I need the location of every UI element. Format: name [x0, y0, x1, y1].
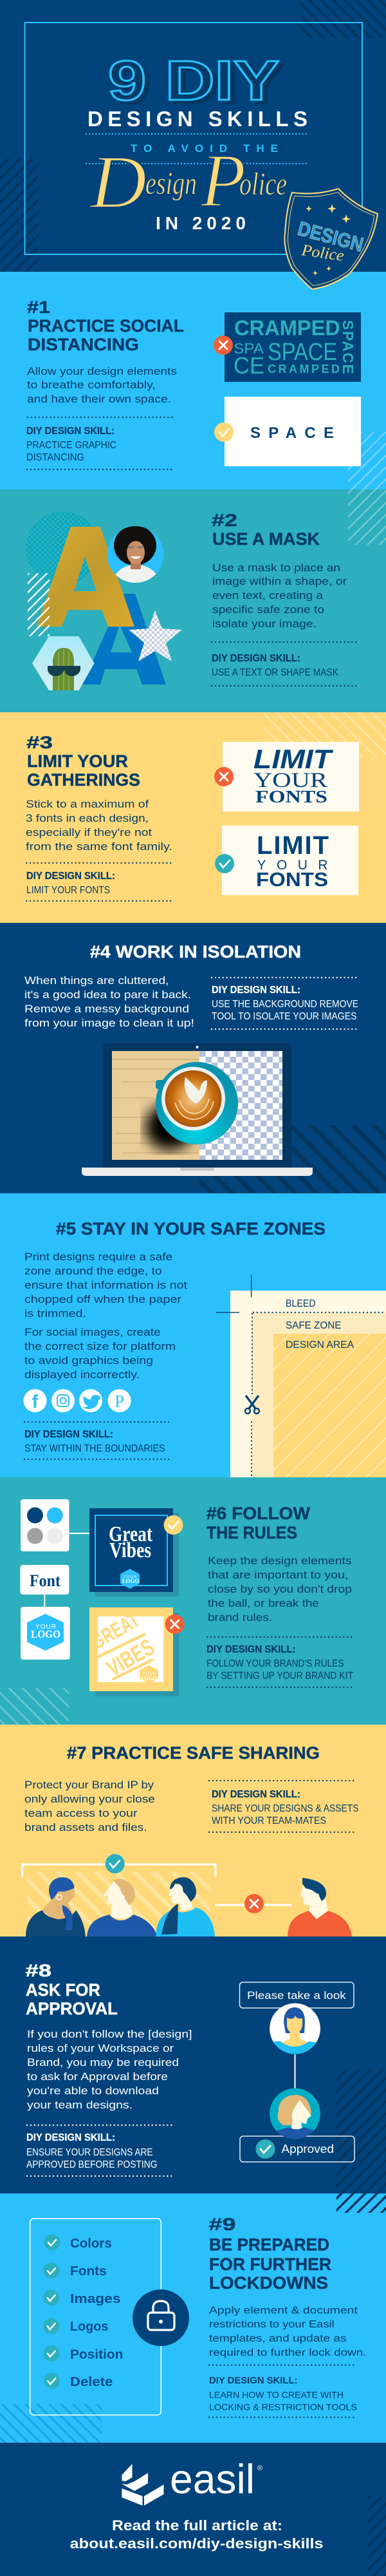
heading #5: #5 STAY IN YOUR SAFE ZONES [56, 1219, 326, 1238]
title: 9 DIY: 9 DIY [113, 53, 284, 115]
title: 9 DIY: 9 DIY [108, 50, 279, 112]
skill: APPROVED BEFORE POSTING [26, 2159, 157, 2170]
panel: stay in your safe zones [0, 1193, 386, 1477]
heading #1: #1 [27, 298, 50, 317]
badge: design police shield [284, 189, 378, 289]
excluded connector [215, 1904, 291, 1906]
body text: Keep the design elements [208, 1555, 351, 1567]
body text: Allow your design elements [27, 366, 177, 377]
heading #3: #3 [26, 733, 53, 752]
skill [212, 985, 358, 1022]
skill [207, 1644, 353, 1681]
title: design police script: D [89, 140, 147, 224]
connectors [44, 1533, 92, 1607]
icon: cross [214, 336, 233, 355]
skill [26, 871, 115, 896]
example: consistent fonts: YOUR [257, 858, 328, 873]
body text: only allowing your close [24, 1794, 155, 1805]
skill: DIY DESIGN SKILL: [212, 1789, 300, 1800]
panel: header [0, 0, 386, 272]
status box: approved: Approved [281, 2143, 334, 2155]
laptop with coffee [82, 1043, 313, 1176]
body text: it's a good idea to pare it back. [24, 989, 191, 1001]
card: logo: YOUR [35, 1624, 56, 1631]
heading #9: BE PREPARED [209, 2235, 329, 2254]
logo: easil [122, 2456, 262, 2506]
body text: close by so you don't drop [208, 1584, 352, 1595]
bad design example: LOGO [141, 1675, 157, 1681]
title: to avoid the: TO AVOID THE [131, 142, 278, 155]
skill: SHARE YOUR DESIGNS & ASSETS [212, 1803, 359, 1814]
skill [212, 1789, 359, 1826]
checklist item: images: Images [70, 2292, 121, 2306]
icons: social media: P [115, 1392, 124, 1411]
body text: Remove a messy background [24, 1003, 189, 1015]
example: consistent fonts: LIMIT [257, 831, 329, 860]
heading #3: GATHERINGS [27, 770, 140, 790]
heading #8 [26, 1961, 118, 2018]
body text: to ask for Approval before [27, 2071, 168, 2083]
call to action [70, 2517, 323, 2552]
person: team member 3 [156, 1877, 215, 1937]
good design example [89, 1508, 179, 1596]
icons: social media: f [32, 1392, 39, 1412]
header frame [24, 23, 362, 254]
example: mixed fonts: FONTS [255, 787, 327, 806]
body text: your team designs. [27, 2099, 133, 2111]
body text: Protect your Brand IP by [24, 1779, 154, 1791]
skill: TOOL TO ISOLATE YOUR IMAGES [212, 1011, 356, 1022]
heading #2: #2 [212, 511, 237, 530]
example: cramped: CE [234, 352, 264, 379]
good design example: LOGO [122, 1578, 139, 1584]
checklist item: position: Position [70, 2348, 123, 2362]
heading #9: FOR FURTHER [209, 2255, 331, 2274]
body text [27, 2029, 192, 2111]
checklist item: fonts: Fonts [70, 2264, 107, 2278]
icon: check [106, 1854, 125, 1873]
body text: For social images, create [24, 1327, 161, 1338]
body text [27, 366, 177, 405]
checklist item: fonts [44, 2263, 107, 2278]
skill: DIY DESIGN SKILL: [24, 1429, 113, 1440]
body text: the ball, or break the [208, 1598, 319, 1609]
letter A gold [37, 527, 134, 627]
body text: to breathe comfortably, [27, 379, 156, 391]
example: cramped: SPACE [340, 320, 356, 374]
body text: ensure that information is not [24, 1280, 187, 1291]
status box: approved [240, 2136, 354, 2162]
heading #4: #4 WORK IN ISOLATION [90, 942, 301, 961]
checklist item: images [43, 2290, 121, 2306]
body text: zone around the edge, to [24, 1265, 162, 1277]
team hatch [27, 1871, 210, 1937]
logo: easil: easil [170, 2456, 255, 2503]
heading #8: #8 [26, 1961, 51, 1980]
bleed diagram [216, 1274, 386, 1477]
mask illustration [26, 511, 182, 690]
icon: cross [244, 1894, 264, 1913]
body text [24, 975, 194, 1029]
skill: LOCKING & RESTRICTION TOOLS [209, 2402, 357, 2412]
team bracket [22, 1864, 216, 1877]
skill: DIY DESIGN SKILL: [209, 2376, 297, 2386]
skill [26, 2132, 157, 2170]
example: space [225, 397, 361, 466]
call to action: about.easil.com/diy-design-skills [70, 2535, 323, 2552]
body text [212, 562, 347, 630]
icon: padlock [133, 2289, 189, 2346]
panel: work in isolation [24, 945, 386, 1193]
masked portrait [107, 526, 165, 583]
heading #6: THE RULES [207, 1523, 297, 1542]
card: font [20, 1565, 69, 1595]
body text: Brand, you may be required [27, 2057, 179, 2069]
panel: follow the rules [0, 1477, 386, 1725]
body text: templates, and update as [209, 2333, 347, 2344]
icons: social media [23, 1389, 131, 1412]
skill: USE THE BACKGROUND REMOVE [212, 999, 358, 1010]
skill: BY SETTING UP YOUR BRAND KIT [207, 1671, 353, 1681]
panel: use a mask [0, 489, 386, 712]
checklist item: logos: Logos [70, 2320, 108, 2334]
title: design police script: esign [145, 165, 197, 201]
checklist panel [30, 2219, 161, 2415]
example: mixed fonts: YOUR [253, 769, 327, 792]
body text: to avoid graphics being [24, 1355, 153, 1367]
heading #9: LOCKDOWNS [209, 2273, 328, 2293]
card: font: Font [30, 1571, 60, 1590]
diagram labels: DESIGN AREA [286, 1340, 354, 1350]
heading #3: LIMIT YOUR [27, 752, 128, 771]
skill: LIMIT YOUR FONTS [26, 885, 110, 896]
body text: even text, creating a [212, 590, 324, 601]
heading #1 [27, 298, 184, 354]
checklist item: delete: Delete [70, 2375, 113, 2389]
approval flow [239, 1982, 386, 2193]
heading #8: APPROVAL [26, 1999, 118, 2018]
diagram labels [286, 1298, 354, 1350]
bad design example [87, 1607, 179, 1696]
body text: rules of your Workspace or [27, 2043, 174, 2054]
card: colors [21, 1499, 69, 1551]
icon: check [215, 854, 234, 873]
skill: FOLLOW YOUR BRAND'S RULES [207, 1658, 344, 1669]
icon: scissors [245, 1396, 259, 1414]
panel: be prepared for further lockdowns [0, 2193, 386, 2443]
skill [26, 426, 116, 463]
icon: check [163, 1515, 183, 1535]
example: cramped [225, 312, 361, 382]
example: cramped: SPA [234, 340, 264, 357]
skill: DIY DESIGN SKILL: [26, 871, 115, 882]
skill: WITH YOUR TEAM-MATES [212, 1815, 326, 1826]
speech box: please take a look [239, 1982, 354, 2008]
checklist item: colors: Colors [70, 2237, 112, 2251]
skill [24, 1429, 165, 1454]
body text: Apply element & document [209, 2306, 358, 2316]
body text [24, 1251, 187, 1381]
heading #9 [208, 2215, 331, 2293]
example: mixed fonts [223, 742, 359, 811]
person: team member 1 [26, 1877, 86, 1937]
body text: restrictions to your Easil [209, 2319, 335, 2330]
body text [209, 2306, 367, 2358]
panel: practice safe sharing [0, 1725, 386, 1937]
body text: required to further lock down. [209, 2347, 367, 2358]
person: team member 2 [87, 1879, 158, 1937]
checklist item: logos [43, 2318, 108, 2334]
body text: team access to your [24, 1808, 138, 1819]
body text: from the same font family. [26, 841, 172, 853]
body text [24, 1779, 155, 1833]
good design example: YOUR [124, 1575, 136, 1579]
avatar: requester [270, 2003, 320, 2054]
checklist item: colors [44, 2235, 112, 2251]
skill: STAY WITHIN THE BOUNDARIES [24, 1443, 165, 1454]
body text: the correct size for platform [24, 1341, 176, 1352]
skill: USE A TEXT OR SHAPE MASK [212, 667, 339, 678]
speech box: please take a look: Please take a look [247, 1989, 346, 2002]
body text: displayed incorrectly. [24, 1369, 140, 1381]
example: cramped: SPACE [268, 339, 337, 366]
example: cramped: CRAMPED [234, 316, 340, 340]
body text: specific safe zone to [212, 604, 324, 616]
body text: chopped off when the paper [24, 1294, 182, 1305]
body text: brand assets and files. [24, 1822, 147, 1833]
skill [209, 2376, 357, 2412]
logo: easil: ® [257, 2465, 262, 2472]
body text: When things are cluttered, [24, 975, 169, 987]
icon: cross [165, 1615, 185, 1634]
body text: that are important to you, [208, 1569, 349, 1581]
body text: brand rules. [208, 1612, 272, 1624]
skill: DIY DESIGN SKILL: [207, 1644, 296, 1655]
skill: DISTANCING [26, 452, 84, 463]
card: logo: LOGO [31, 1628, 60, 1640]
checklist item: delete [44, 2372, 113, 2389]
body text: Stick to a maximum of [26, 799, 149, 810]
bad design example: YOUR [143, 1672, 155, 1676]
heading #1: PRACTICE SOCIAL [28, 316, 184, 336]
person: excluded member [288, 1878, 352, 1937]
title: design skills: DESIGN SKILLS [87, 107, 308, 131]
body text: is trimmed. [24, 1308, 86, 1320]
body text [26, 799, 172, 853]
panel: limit your gatherings [0, 712, 386, 923]
panel: practice social distancing [0, 272, 386, 489]
example: consistent fonts [222, 826, 358, 895]
letter A blue [82, 594, 166, 685]
skill: DIY DESIGN SKILL: [212, 985, 300, 996]
bad design example: GREAT [87, 1607, 143, 1654]
checker star [129, 611, 182, 661]
skill: DIY DESIGN SKILL: [212, 653, 300, 664]
heading #6 [207, 1504, 310, 1542]
badge: design police shield: DESIGN [295, 217, 366, 256]
skill [212, 653, 339, 678]
icon: check [214, 422, 234, 442]
icon: cross [214, 767, 234, 786]
panel: footer [0, 2443, 386, 2576]
diagram labels: BLEED [286, 1298, 316, 1309]
title: design police script [89, 138, 287, 224]
body text: image within a shape, or [212, 576, 347, 587]
example: mixed fonts: LIMIT [253, 744, 334, 774]
body text: Use a mask to place an [212, 562, 340, 574]
body text: 3 fonts in each design, [26, 813, 149, 824]
checklist item: position [44, 2345, 123, 2362]
example: space: SPACE [250, 424, 334, 442]
card: logo [21, 1607, 70, 1660]
title: in 2020: IN 2020 [156, 213, 246, 233]
title: design police script: P [200, 138, 246, 223]
body text [208, 1555, 352, 1624]
bad design example: VIBES [102, 1633, 159, 1681]
body text: If you don't follow the [design] [27, 2029, 192, 2040]
heading #2: USE A MASK [212, 529, 320, 549]
body text: Print designs require a safe [24, 1251, 172, 1263]
example: consistent fonts: FONTS [256, 868, 328, 891]
body text: you're able to download [27, 2085, 159, 2097]
heading #3 [26, 733, 140, 790]
panel: ask for approval [0, 1937, 386, 2193]
title: design police script: olice [239, 166, 287, 202]
good design example: Great [109, 1522, 153, 1546]
example: cramped: CRAMPED [268, 363, 340, 375]
skill: ENSURE YOUR DESIGNS ARE [26, 2147, 153, 2158]
skill: PRACTICE GRAPHIC [26, 440, 116, 451]
skill: DIY DESIGN SKILL: [26, 426, 115, 437]
heading #9: #9 [208, 2215, 235, 2234]
call to action: Read the full article at: [112, 2517, 282, 2533]
heading #8: ASK FOR [26, 1980, 100, 2000]
heading #1: DISTANCING [28, 335, 139, 354]
body text: especially if they're not [26, 827, 152, 838]
heading #2 [212, 511, 320, 549]
heading #6: #6 FOLLOW [207, 1504, 310, 1523]
diagram labels: SAFE ZONE [286, 1320, 341, 1331]
skill: DIY DESIGN SKILL: [26, 2132, 115, 2143]
avatar: approver [269, 2088, 322, 2141]
badge: design police shield: Police [300, 242, 345, 265]
body text: isolate your image. [212, 618, 317, 630]
body text: and have their own space. [27, 393, 171, 405]
body text: from your image to clean it up! [24, 1018, 194, 1029]
masked cactus hexagon [32, 636, 95, 690]
good design example: Vibes [109, 1539, 151, 1562]
skill: LEARN HOW TO CREATE WITH [209, 2389, 344, 2400]
heading #7: #7 PRACTICE SAFE SHARING [67, 1743, 320, 1763]
